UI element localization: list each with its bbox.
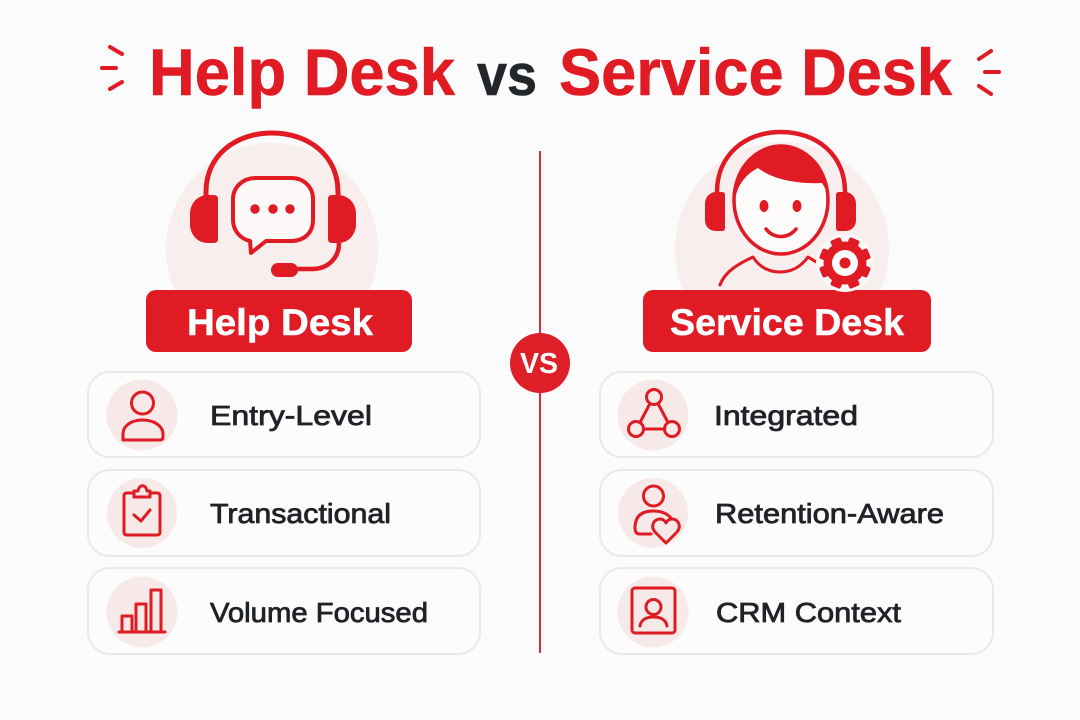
panel: crm context card: CRM Context <box>716 597 901 628</box>
title: Service Desk <box>559 35 952 109</box>
icon: person with heart <box>635 486 679 543</box>
icon: network triangle <box>628 390 680 436</box>
panel: integrated card <box>600 372 993 457</box>
title: vs <box>477 43 537 108</box>
icon: contact card <box>632 588 675 633</box>
panel: transactional card <box>88 470 480 556</box>
icon: left title sparkle <box>102 47 122 89</box>
vs badge <box>510 333 570 393</box>
panel: crm context card <box>600 568 993 654</box>
panel: entry-level card: Entry-Level <box>210 400 372 431</box>
icon: bar chart <box>119 590 165 632</box>
center divider <box>539 151 541 653</box>
panel: transactional card: Transactional <box>210 498 391 529</box>
icon: clipboard <box>124 486 160 535</box>
panel: integrated card: Integrated <box>714 400 858 431</box>
icon: service desk agent with headset <box>675 130 889 290</box>
title <box>149 35 952 109</box>
panel: volume focused card <box>88 568 480 654</box>
panel: retention-aware card: Retention-Aware <box>715 498 944 529</box>
title: Help Desk <box>149 35 455 109</box>
icon: person <box>123 392 163 440</box>
label: help desk <box>146 290 412 352</box>
icon: gear <box>811 229 879 297</box>
panel: retention-aware card <box>600 470 993 556</box>
icon: right title sparkle <box>979 51 999 94</box>
label: help desk: Help Desk <box>187 302 373 343</box>
icon: help desk headset with chat bubble <box>166 130 378 290</box>
panel: volume focused card: Volume Focused <box>210 597 428 628</box>
vs badge: VS <box>520 348 558 380</box>
label: service desk: Service Desk <box>670 302 904 343</box>
label: service desk <box>643 290 931 352</box>
panel: entry-level card <box>88 372 480 457</box>
